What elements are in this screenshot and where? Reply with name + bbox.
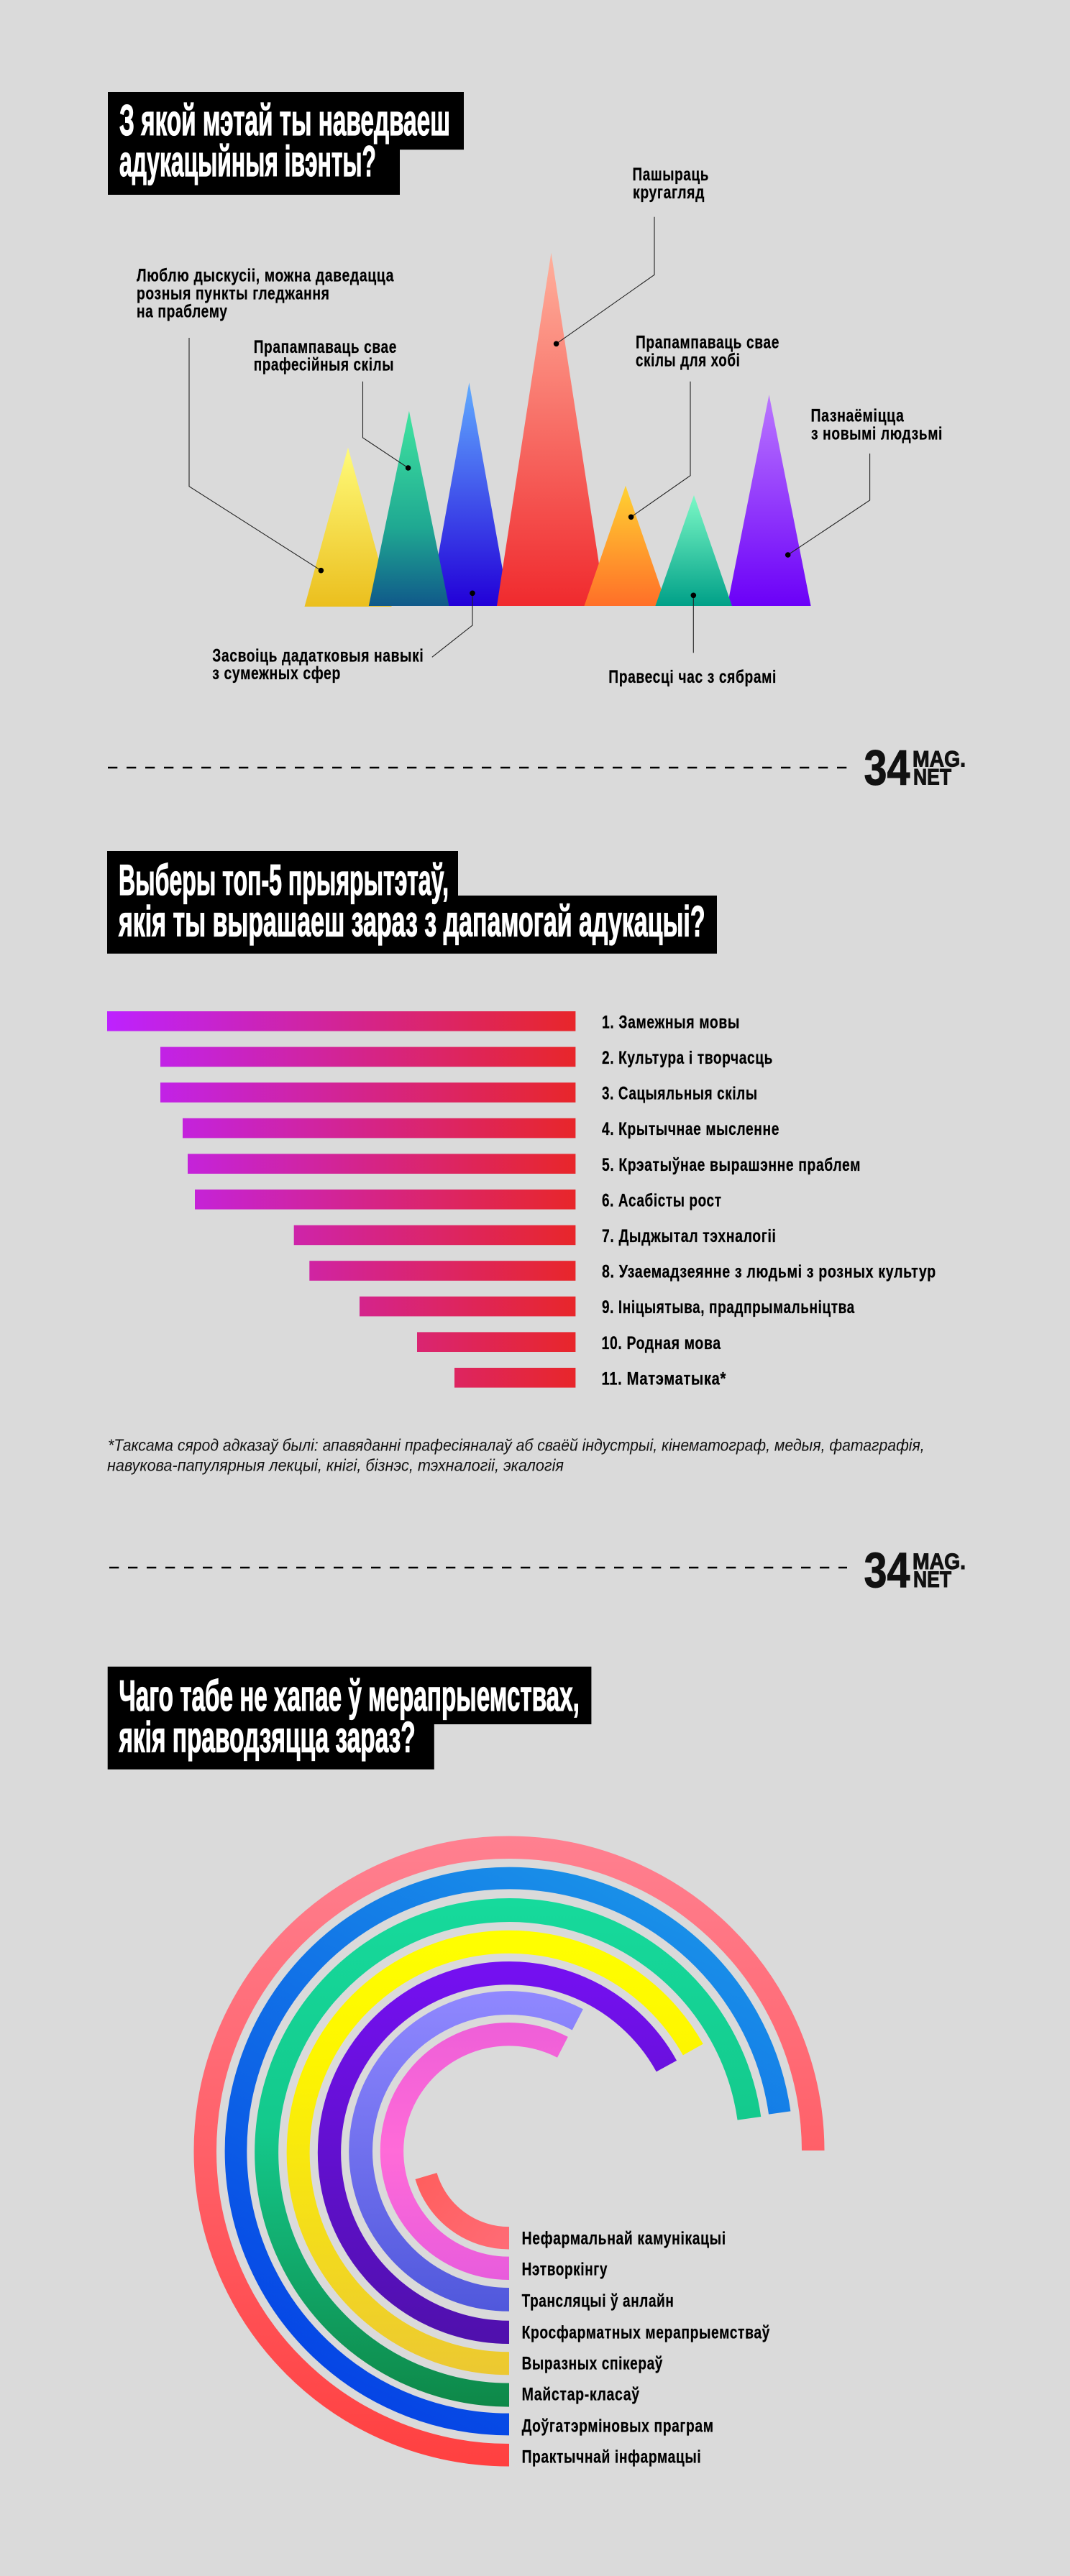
chart legend: Нэтворкінгу (522, 2260, 608, 2280)
callout: time with friends: Правесці час з сябрамі (608, 667, 777, 687)
bar 1: 1. Замежныя мовы (602, 1012, 740, 1032)
logo: 34mag.net (864, 1542, 966, 1598)
triangle: orange, hobby skills (584, 486, 667, 606)
bar 6: 6. Асабісты рост (602, 1190, 722, 1210)
bar 7: 7. Дыджытал тэхналогіі (602, 1226, 777, 1246)
callout: discussions: розныя пункты гледжання (137, 284, 329, 304)
chart legend: Нефармальнай камунікацыі (522, 2229, 726, 2249)
chart legend: Доўгатэрміновых праграм (522, 2416, 714, 2436)
triangle: teal, time with friends (655, 495, 732, 606)
bar 2 (160, 1047, 773, 1068)
bar 4 (183, 1118, 779, 1139)
bar 5: 5. Крэатыўнае вырашэнне праблем (602, 1155, 861, 1175)
callout: professional skills: Прапампаваць свае (254, 337, 397, 357)
footnote: *Таксама сярод адказаў былі: апавяданні прафесіяналаў аб сваёй індустрыі, кінематограф, медыя, фатаграфія, (108, 1435, 925, 1454)
callout: meet new people: Пазнаёміцца (811, 406, 905, 426)
ring: practical information (205, 1847, 813, 2455)
bar 6 (195, 1190, 722, 1210)
radial bar chart: what is missing (205, 1847, 813, 2455)
callout: hobby skills: Прапампаваць свае (636, 332, 779, 352)
bar 9 (360, 1297, 855, 1317)
callout: broaden outlook: Пашыраць (633, 165, 709, 185)
callout: time with friends (608, 592, 777, 687)
chart legend: Майстар-класаў (522, 2384, 640, 2404)
footnote (107, 1435, 925, 1475)
bar 10: 10. Родная мова (601, 1333, 721, 1353)
callout: broaden outlook (554, 165, 709, 346)
section 3 heading: Чаго табе не хапае ў мерапрыемствах, (119, 1672, 580, 1720)
chart legend (522, 2229, 770, 2467)
logo: 34mag.net (864, 740, 966, 795)
triangle: purple, meet people (727, 395, 811, 606)
triangle: red, broaden outlook (497, 253, 605, 606)
bar 7 (294, 1225, 777, 1246)
triangle: blue, adjacent skills (429, 382, 509, 606)
callout: broaden outlook: кругагляд (633, 183, 705, 203)
chart legend: Трансляцыі ў анлайн (522, 2291, 675, 2311)
bar 10 (417, 1332, 721, 1353)
bar 11: 11. Матэматыка* (601, 1368, 726, 1389)
section 1 heading: адукацыйныя івэнты? (119, 137, 376, 185)
chart legend: Практычнай інфармацыі (522, 2447, 701, 2467)
section 3 heading (108, 1667, 591, 1770)
ring: informal communication (426, 2176, 509, 2238)
footnote: навукова-папулярныя лекцыі, кнігі, бізнэс, тэхналогіі, экалогія (107, 1456, 564, 1475)
callout: hobby skills (628, 332, 779, 520)
callout: discussions: Люблю дыскусіі, можна даведацца (137, 266, 394, 286)
logo: 34mag.net: 34 (864, 1542, 910, 1598)
bar 1 (107, 1011, 740, 1032)
triangle chart: event goals (305, 253, 811, 607)
chart legend: Выразных спікераў (522, 2354, 663, 2374)
callout: adjacent skills (212, 591, 475, 684)
callout: professional skills (254, 337, 411, 471)
bar chart: top priorities (107, 1011, 936, 1389)
section 3 heading: якія праводзяцца зараз? (119, 1713, 416, 1761)
logo: 34mag.net: 34 (864, 740, 910, 795)
ring: online streams (361, 2003, 577, 2299)
ring: long-term programmes (236, 1878, 779, 2424)
callout: adjacent skills: з сумежных сфер (212, 663, 341, 684)
callout: discussions (137, 266, 394, 574)
triangle: yellow, new skills (305, 448, 392, 607)
bar 9: 9. Ініцыятыва, прадпрымальніцтва (602, 1297, 855, 1317)
section 1 heading: З якой мэтай ты наведваеш (119, 96, 450, 144)
bar 3 (160, 1082, 758, 1104)
bar 8: 8. Узаемадзеянне з людьмі з розных культур (602, 1262, 936, 1282)
bar 3: 3. Сацыяльныя скілы (602, 1084, 758, 1104)
ring: cross-format events (329, 1973, 667, 2332)
bar 4: 4. Крытычнае мысленне (602, 1119, 779, 1139)
logo: 34mag.net: NET (913, 764, 951, 790)
bar 8 (309, 1261, 936, 1282)
section 2 heading: Выберы топ-5 прыярытэтаў, (119, 856, 449, 904)
callout: professional skills: прафесійныя скілы (254, 355, 394, 375)
section 2 heading (107, 851, 717, 954)
triangle: green, professional skills (369, 411, 449, 606)
logo: 34mag.net: MAG. (913, 1548, 966, 1574)
logo: 34mag.net: MAG. (913, 746, 966, 772)
callout: meet new people: з новымі людзьмі (811, 424, 943, 444)
logo: 34mag.net: NET (913, 1566, 951, 1592)
bar 11 (454, 1368, 726, 1389)
callout: meet new people (785, 406, 943, 558)
bar 5 (188, 1154, 861, 1175)
callout: hobby skills: скілы для хобі (636, 350, 741, 370)
ring: master classes (267, 1910, 749, 2395)
chart legend: Кросфарматных мерапрыемстваў (522, 2322, 770, 2342)
ring: networking (392, 2034, 562, 2268)
bar 2: 2. Культура і творчасць (602, 1048, 773, 1068)
callout: discussions: на праблему (137, 302, 227, 322)
section 1 heading (108, 92, 464, 195)
ring: bright speakers (298, 1942, 693, 2363)
callout: adjacent skills: Засвоіць дадатковыя навыкі (212, 646, 424, 666)
